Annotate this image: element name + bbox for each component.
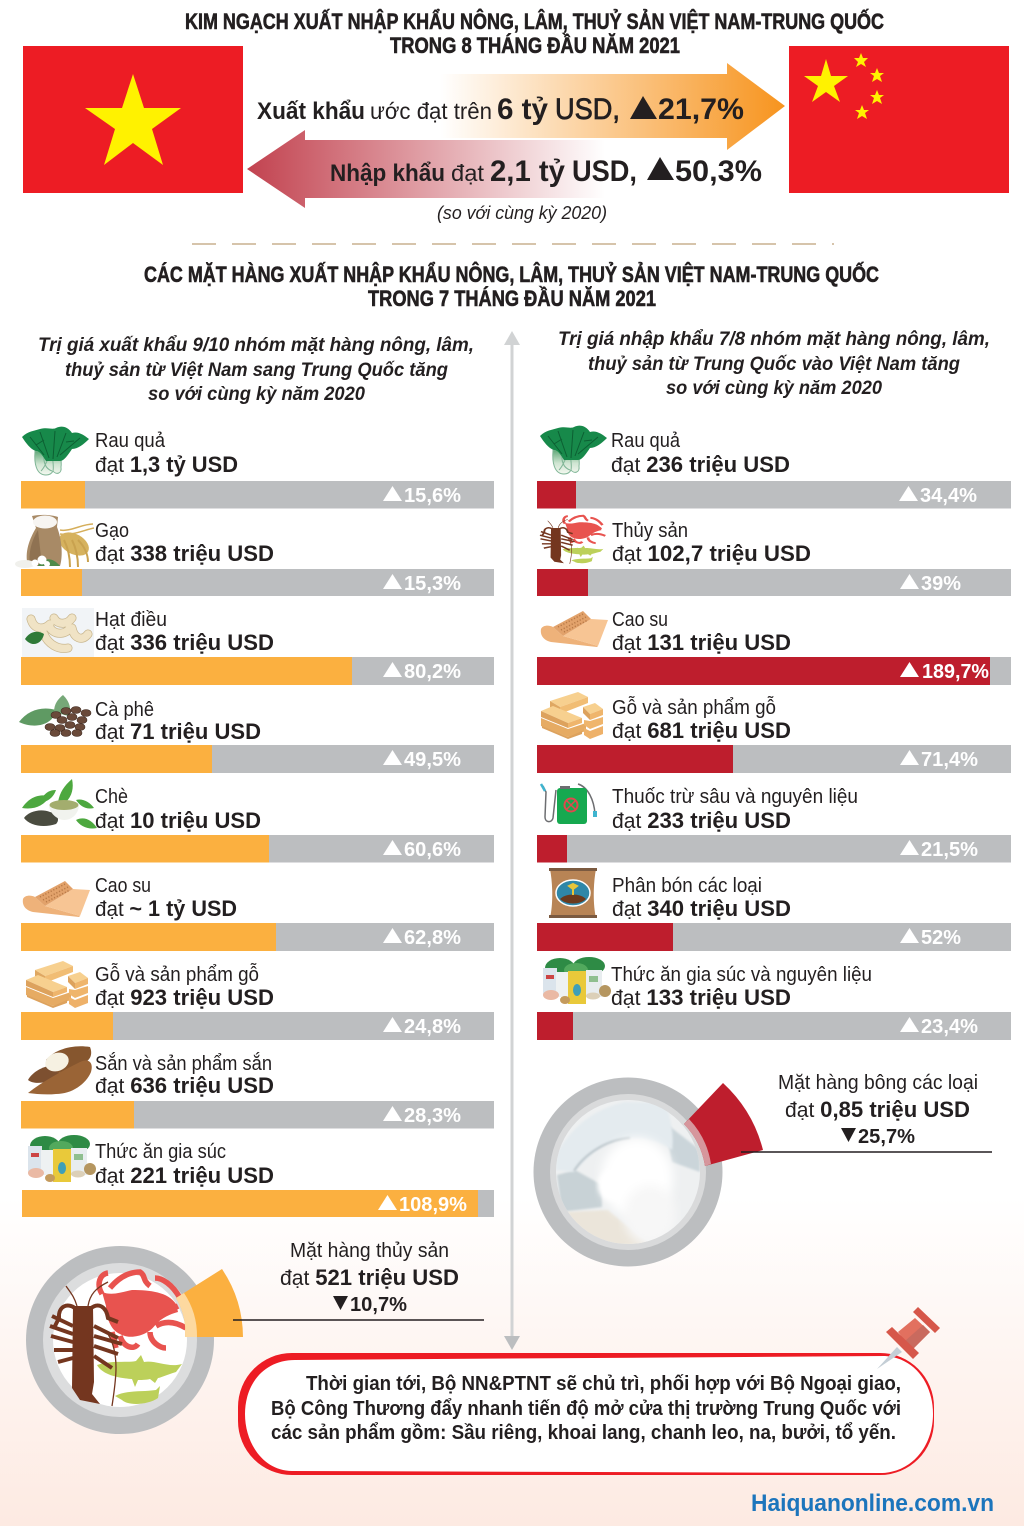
import text: 50,3% xyxy=(675,155,762,188)
bar: 52% xyxy=(921,927,961,949)
bar: 189,7% xyxy=(922,661,989,683)
icon: vegetables xyxy=(540,426,607,474)
export text: 6 tỷ xyxy=(497,93,548,126)
row: Gỗ (xuất khẩu) xyxy=(21,961,494,1040)
label: đạt 233 triệu USD xyxy=(612,808,791,833)
icon: animal feed xyxy=(28,1135,96,1182)
heading: import column: Trị giá nhập khẩu 7/8 nhóm mặt hàng nông, lâm, xyxy=(558,329,990,350)
row: Sắn xyxy=(21,1046,494,1128)
arrow: import xyxy=(247,130,605,208)
heading: export column: so với cùng kỳ năm 2020 xyxy=(148,384,365,405)
icon: fertilizer xyxy=(549,868,597,918)
label: đạt 133 triệu USD xyxy=(611,985,791,1010)
icon: rubber xyxy=(23,881,90,917)
row: Cà phê xyxy=(19,695,494,773)
row: Thức ăn gia súc và nguyên liệu xyxy=(537,957,1011,1040)
heading: import column: so với cùng kỳ năm 2020 xyxy=(666,378,882,399)
label: Phân bón các loại xyxy=(612,875,762,897)
icon: cassava xyxy=(28,1046,92,1094)
label xyxy=(95,520,274,566)
label xyxy=(95,699,261,744)
row: Gạo xyxy=(15,515,494,596)
label xyxy=(95,786,261,833)
label: đạt 236 triệu USD xyxy=(611,452,790,477)
text: seafood value xyxy=(280,1240,459,1316)
label: đạt 923 triệu USD xyxy=(95,985,274,1010)
bar xyxy=(537,569,1011,596)
export text xyxy=(257,93,744,126)
label: đạt 131 triệu USD xyxy=(612,630,791,655)
source: Haiquanonline.com.vn xyxy=(751,1490,994,1517)
label: đạt 338 triệu USD xyxy=(95,541,274,566)
label: Cao su xyxy=(95,875,151,897)
bar xyxy=(537,835,1011,862)
bar xyxy=(537,1012,1011,1040)
row: Thuốc trừ sâu xyxy=(537,784,1011,862)
row: Rau quả (nhập khẩu) xyxy=(537,426,1011,508)
bar xyxy=(537,657,1011,685)
label: Gỗ và sản phẩm gỗ xyxy=(95,963,259,986)
arrow: export xyxy=(440,63,785,150)
arrow: vertical divider xyxy=(504,331,520,1350)
icon: seafood xyxy=(50,1272,186,1406)
label: đạt 1,3 tỷ USD xyxy=(95,452,238,477)
text: cotton value: đạt 0,85 triệu USD xyxy=(785,1097,970,1122)
icon: tea xyxy=(22,779,97,829)
flag: Vietnam xyxy=(23,46,243,193)
import text: 2,1 tỷ xyxy=(490,155,565,188)
label xyxy=(611,964,872,1010)
label: Gạo xyxy=(95,520,129,542)
icon: sprayer xyxy=(541,784,597,824)
icon: cashew xyxy=(22,608,94,657)
bar xyxy=(22,1190,494,1217)
label: Thức ăn gia súc và nguyên liệu xyxy=(611,964,872,986)
export text: ước đạt trên xyxy=(370,98,492,124)
bar xyxy=(21,481,494,508)
row: Cao su (xuất khẩu) xyxy=(21,875,494,951)
label: đạt 636 triệu USD xyxy=(95,1073,274,1098)
label xyxy=(612,520,811,566)
bar xyxy=(21,569,494,596)
label: Chè xyxy=(95,786,128,808)
label: đạt 102,7 triệu USD xyxy=(612,541,811,566)
label xyxy=(95,963,274,1010)
bar: 62,8% xyxy=(404,927,461,949)
label xyxy=(612,609,791,655)
bar: 21,5% xyxy=(921,839,978,861)
label xyxy=(611,430,790,477)
row: Rau quả (xuất khẩu) xyxy=(21,427,494,508)
label xyxy=(95,1141,274,1188)
callout text xyxy=(271,1373,901,1444)
row: Gỗ (nhập khẩu) xyxy=(537,692,1011,773)
icon: pin xyxy=(877,1307,940,1369)
label: đạt 336 triệu USD xyxy=(95,630,274,655)
bar xyxy=(21,923,494,951)
ring chart: seafood xyxy=(26,1246,243,1434)
export text: Xuất khẩu xyxy=(257,98,365,125)
label: đạt 221 triệu USD xyxy=(95,1163,274,1188)
bar xyxy=(21,1012,494,1040)
label: Sắn và sản phẩm sắn xyxy=(95,1052,272,1075)
text: cotton value xyxy=(778,1072,978,1148)
heading: export column xyxy=(38,335,474,405)
bar: 23,4% xyxy=(921,1016,978,1038)
callout text: các sản phẩm gồm: Sầu riêng, khoai lang, chanh leo, na, bưởi, tổ yến. xyxy=(271,1422,896,1444)
background gradient xyxy=(0,1180,1024,1526)
bar xyxy=(537,745,1011,773)
title: kim ngạch xyxy=(185,8,884,58)
bar xyxy=(21,745,494,773)
label: Gỗ và sản phẩm gỗ xyxy=(612,696,776,719)
callout: next steps xyxy=(238,1353,934,1475)
label: đạt 681 triệu USD xyxy=(612,718,791,743)
label: Thức ăn gia súc xyxy=(95,1141,226,1163)
text: seafood value: đạt 521 triệu USD xyxy=(280,1265,459,1290)
icon: rice xyxy=(15,515,94,568)
heading: import column xyxy=(558,329,990,399)
label: đạt ~ 1 tỷ USD xyxy=(95,896,237,921)
bar xyxy=(21,1101,494,1128)
title: kim ngạch: TRONG 8 THÁNG ĐẦU NĂM 2021 xyxy=(390,33,680,58)
bar: 39% xyxy=(921,573,961,595)
text: seafood value: 10,7% xyxy=(350,1294,407,1316)
bar: 24,8% xyxy=(404,1016,461,1038)
label: Thuốc trừ sâu và nguyên liệu xyxy=(612,786,858,808)
label xyxy=(95,1052,274,1098)
icon: animal feed xyxy=(543,957,611,1004)
flag: China xyxy=(789,46,1009,193)
icon: vegetables xyxy=(22,427,89,475)
bar: 71,4% xyxy=(921,749,978,771)
label xyxy=(95,430,238,477)
heading: export column: thuỷ sản từ Việt Nam sang Trung Quốc tăng xyxy=(65,360,448,381)
export text: 21,7% xyxy=(658,93,744,126)
note: comparison period: (so với cùng kỳ 2020) xyxy=(437,203,607,223)
import text: USD, xyxy=(572,155,637,188)
icon: coffee xyxy=(19,695,91,736)
row: Thức ăn gia súc xyxy=(22,1135,494,1217)
text: cotton value: Mặt hàng bông các loại xyxy=(778,1072,978,1094)
callout text: Bộ Công Thương đẩy nhanh tiến độ mở cửa thị trường Trung Quốc với xyxy=(271,1398,901,1420)
title: kim ngạch: KIM NGẠCH XUẤT NHẬP KHẨU NÔNG, LÂM, THUỶ SẢN VIỆT NAM-TRUNG QUỐC xyxy=(185,8,884,34)
label: đạt 10 triệu USD xyxy=(95,808,261,833)
heading: import column: thuỷ sản từ Trung Quốc vào Việt Nam tăng xyxy=(588,354,960,375)
bar: 15,6% xyxy=(404,485,461,507)
icon: seafood xyxy=(540,516,605,564)
icon: rubber xyxy=(541,611,608,647)
export text: USD, xyxy=(555,93,620,126)
label: Rau quả xyxy=(611,430,681,452)
icon: wood xyxy=(26,961,88,1008)
bar xyxy=(21,835,494,862)
panel: seafood decline xyxy=(26,1240,484,1434)
text: seafood value: Mặt hàng thủy sản xyxy=(290,1240,449,1262)
label: Thủy sản xyxy=(612,520,688,542)
label: đạt 71 triệu USD xyxy=(95,719,261,744)
label: Cao su xyxy=(612,609,668,631)
bar: 28,3% xyxy=(404,1105,461,1127)
row: Phân bón xyxy=(537,868,1011,951)
bar: 49,5% xyxy=(404,749,461,771)
callout text: Thời gian tới, Bộ NN&PTNT sẽ chủ trì, phối hợp với Bộ Ngoại giao, xyxy=(306,1373,901,1395)
icon: wood xyxy=(541,692,603,739)
bar: 34,4% xyxy=(920,485,977,507)
title: các mặt hàng xyxy=(144,261,879,311)
bar: 15,3% xyxy=(404,573,461,595)
label: Cà phê xyxy=(95,699,154,721)
heading: export column: Trị giá xuất khẩu 9/10 nhóm mặt hàng nông, lâm, xyxy=(38,335,474,356)
label xyxy=(612,875,791,921)
label xyxy=(95,609,274,655)
import text: đạt xyxy=(451,160,485,186)
label: Rau quả xyxy=(95,430,166,452)
text: cotton value: 25,7% xyxy=(858,1126,915,1148)
bar xyxy=(537,923,1011,951)
row: Chè xyxy=(21,779,494,862)
panel: cotton decline xyxy=(534,1072,992,1266)
import text: Nhập khẩu xyxy=(330,160,445,187)
title: các mặt hàng: TRONG 7 THÁNG ĐẦU NĂM 2021 xyxy=(368,286,656,311)
label: đạt 340 triệu USD xyxy=(612,896,791,921)
ring chart: cotton xyxy=(534,1078,763,1266)
bar: 80,2% xyxy=(404,661,461,683)
label: Hạt điều xyxy=(95,609,167,631)
bar xyxy=(537,481,1011,508)
label xyxy=(612,786,858,833)
label xyxy=(612,696,791,743)
label xyxy=(95,875,237,921)
bar: 108,9% xyxy=(399,1194,467,1216)
bar xyxy=(21,657,494,685)
import text xyxy=(330,155,762,188)
row: Hạt điều xyxy=(21,608,494,685)
bar: 60,6% xyxy=(404,839,461,861)
row: Cao su (nhập khẩu) xyxy=(537,609,1011,685)
row: Thủy sản xyxy=(537,516,1011,596)
title: các mặt hàng: CÁC MẶT HÀNG XUẤT NHẬP KHẨU NÔNG, LÂM, THUỶ SẢN VIỆT NAM-TRUNG QUỐC xyxy=(144,261,879,287)
